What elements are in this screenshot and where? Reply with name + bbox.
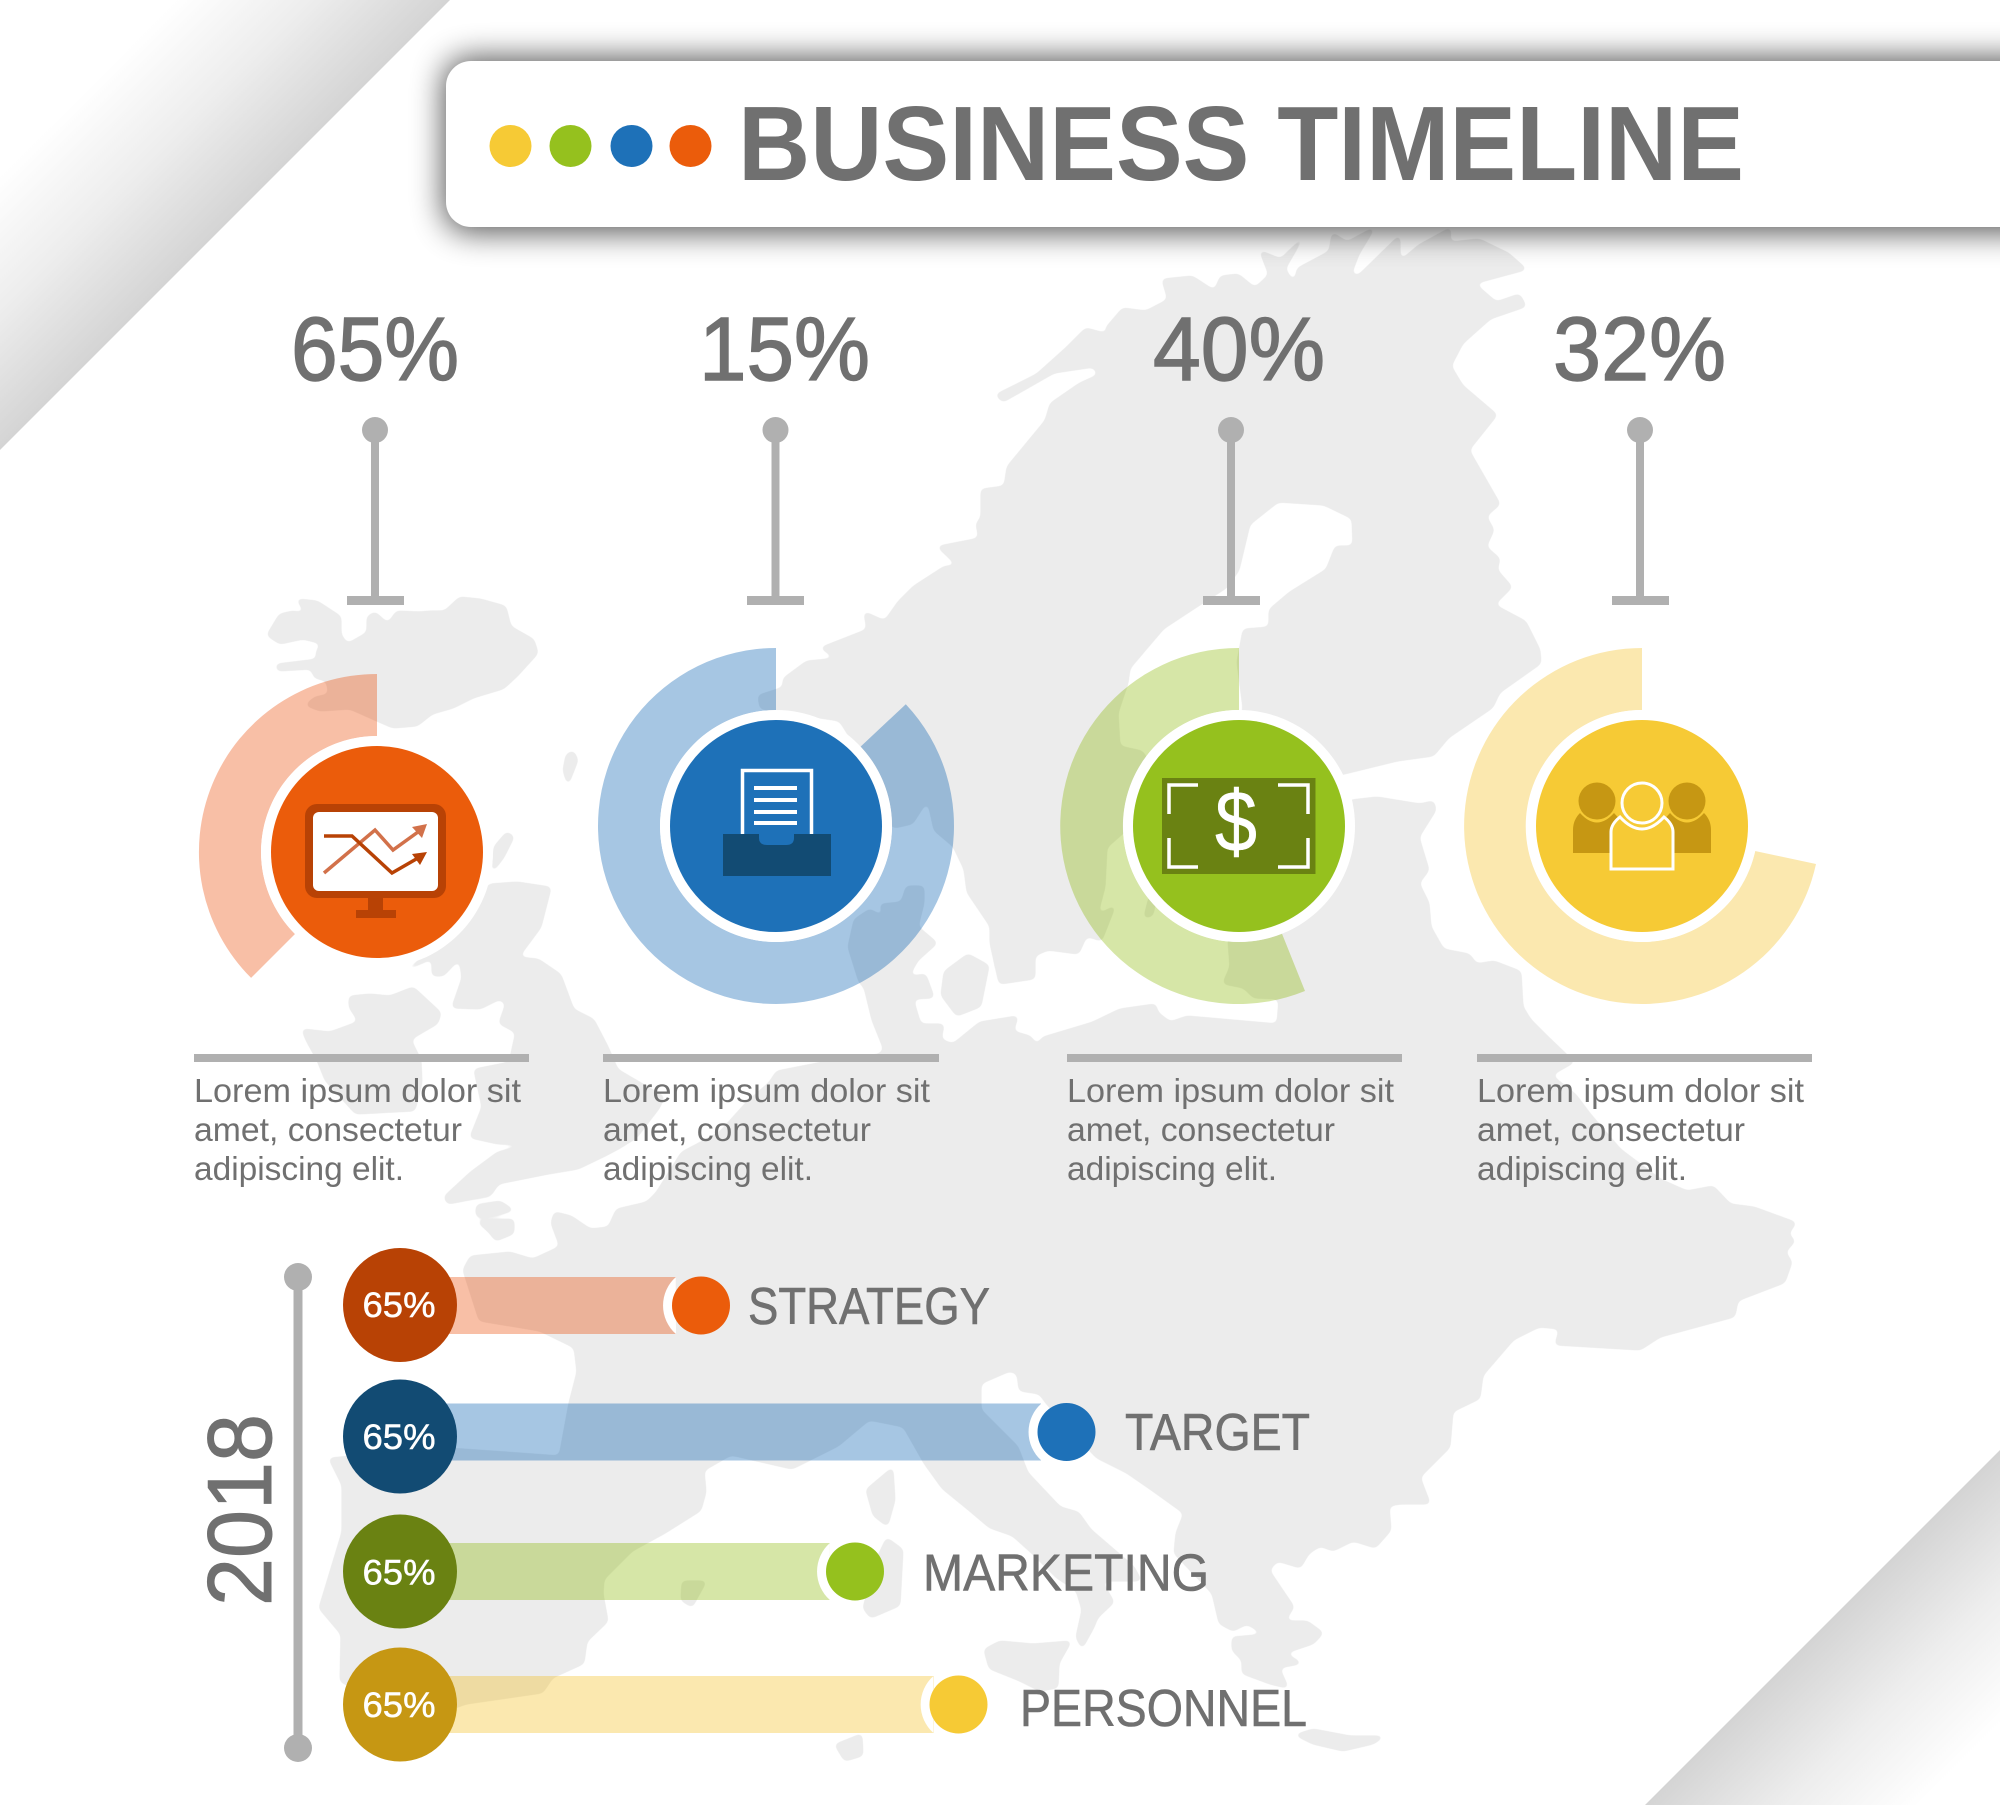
description text: amet, consectetur — [194, 1111, 462, 1148]
column 2: target percentage, pin and donut — [598, 300, 954, 1187]
description text: adipiscing elit. — [603, 1150, 813, 1187]
year label 2018: 2018 — [190, 1414, 291, 1606]
header banner — [444, 58, 2000, 232]
description text: amet, consectetur — [1477, 1111, 1745, 1148]
column 4: personnel percentage, pin and donut — [1464, 300, 1816, 1187]
description text: Lorem ipsum dolor sit — [1067, 1072, 1394, 1109]
percentage 65%: 65% — [291, 300, 459, 400]
description text: adipiscing elit. — [1067, 1150, 1277, 1187]
description text — [1067, 1072, 1394, 1187]
background map of Europe — [268, 229, 1795, 1760]
divider line — [1477, 1054, 1812, 1062]
title: BUSINESS TIMELINE — [738, 85, 1744, 203]
column 1: strategy percentage, pin and donut — [194, 300, 529, 1187]
pin connector — [747, 417, 804, 605]
percentage 32%: 32% — [1553, 300, 1726, 400]
percentage 40%: 40% — [1153, 300, 1325, 400]
orange circle — [271, 746, 483, 958]
yellow circle — [1536, 720, 1748, 932]
description text: Lorem ipsum dolor sit — [1477, 1072, 1804, 1109]
colored header dots — [490, 125, 712, 167]
description text: Lorem ipsum dolor sit — [603, 1072, 930, 1109]
description text: Lorem ipsum dolor sit — [194, 1072, 521, 1109]
donut ring blue — [598, 648, 954, 1004]
bottom-right page fold — [1645, 1450, 2000, 1805]
description text: adipiscing elit. — [1477, 1150, 1687, 1187]
bar: personnel: 65% — [362, 1686, 436, 1725]
white halo — [660, 710, 892, 942]
green circle — [1133, 720, 1345, 932]
donut ring orange — [199, 674, 377, 978]
bar: marketing: 65% — [362, 1554, 436, 1592]
icon: monitor with chart — [305, 804, 446, 918]
divider line — [603, 1054, 939, 1062]
bar: strategy — [343, 1248, 990, 1362]
description text: amet, consectetur — [603, 1111, 871, 1148]
donut ring yellow — [1464, 648, 1816, 1004]
description text: adipiscing elit. — [194, 1150, 404, 1187]
bar: marketing — [343, 1514, 1209, 1628]
donut ring green — [1060, 648, 1305, 1004]
bar: personnel — [343, 1648, 1307, 1762]
year timeline axis — [284, 1263, 312, 1762]
pin connector — [347, 417, 404, 605]
bar: marketing: MARKETING — [923, 1544, 1209, 1602]
bar: target: TARGET — [1125, 1404, 1310, 1462]
divider line — [1067, 1054, 1402, 1062]
white halo — [1123, 710, 1355, 942]
bar: target: 65% — [362, 1418, 436, 1457]
icon: dollar bill — [1162, 774, 1316, 874]
description text: amet, consectetur — [1067, 1111, 1335, 1148]
icon: dollar bill: $ — [1215, 774, 1257, 870]
description text — [1477, 1072, 1804, 1187]
white halo — [1526, 710, 1758, 942]
bar: target — [343, 1380, 1310, 1494]
white halo — [261, 736, 493, 968]
bar: strategy: 65% — [362, 1286, 436, 1325]
bar: personnel: PERSONNEL — [1020, 1680, 1307, 1738]
pin connector — [1203, 417, 1260, 605]
description text — [603, 1072, 930, 1187]
description text — [194, 1072, 521, 1187]
blue circle — [670, 720, 882, 932]
percentage 15%: 15% — [699, 300, 870, 400]
icon: document in tray — [723, 770, 831, 876]
top-left page fold — [0, 0, 450, 450]
pin connector — [1612, 417, 1669, 605]
bar: strategy: STRATEGY — [748, 1278, 990, 1336]
divider line — [194, 1054, 529, 1062]
icon: group of people — [1573, 782, 1711, 869]
column 3: marketing percentage, pin and donut — [1060, 300, 1402, 1187]
